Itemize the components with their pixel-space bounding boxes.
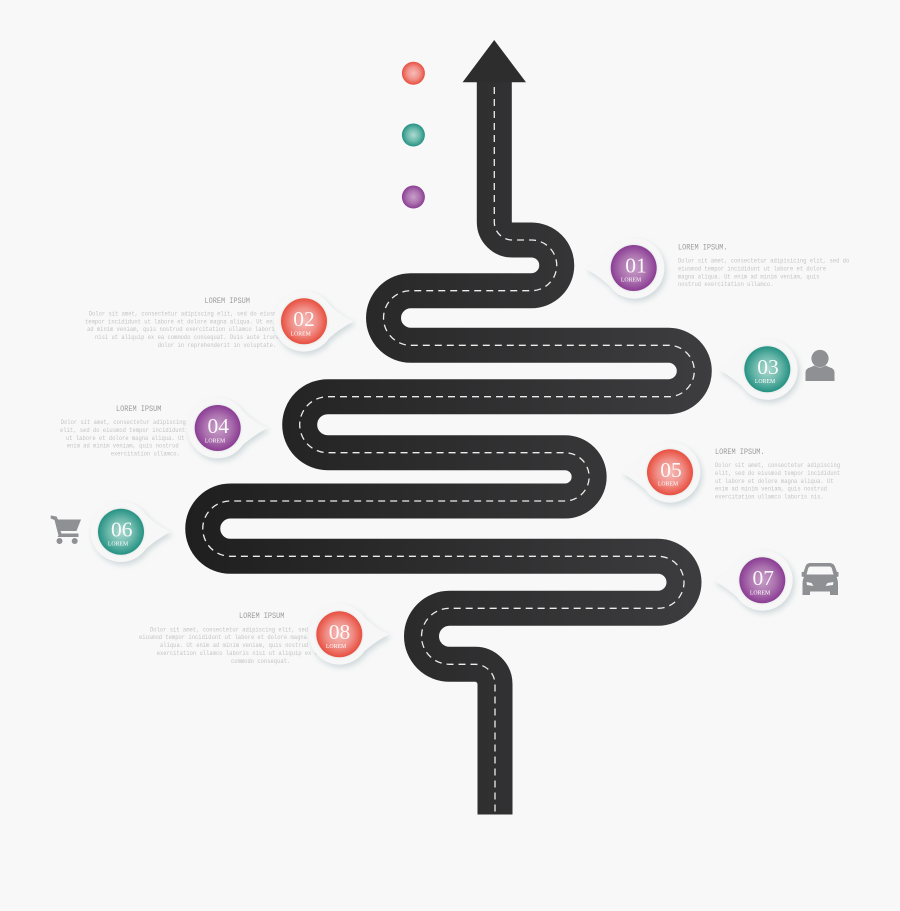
text block 05: Dolor sit amet, consectetur adipiscing <box>715 462 840 469</box>
text block 05: LOREM IPSUM. <box>715 448 764 457</box>
marker 04 <box>187 398 268 458</box>
marker 03: 03 <box>757 355 779 379</box>
winding road with arrowhead <box>203 40 694 814</box>
text block 02 <box>85 297 283 349</box>
text block 04: exercitation ullamco. <box>111 450 180 458</box>
marker 01 <box>585 238 664 299</box>
decorative dot: purple <box>402 186 425 208</box>
text block 04 <box>60 405 186 458</box>
marker 03 <box>718 339 798 400</box>
text block 04: LOREM IPSUM <box>116 405 162 414</box>
icon: shopping cart <box>51 516 81 544</box>
marker 08: LOREM <box>326 644 346 650</box>
marker 05: 05 <box>660 458 682 482</box>
marker 01: LOREM <box>621 278 641 284</box>
road surface <box>203 80 694 814</box>
text block 02: Dolor sit amet, consectetur adipiscing elit, sed do eiusmod <box>89 310 283 318</box>
text block 05 <box>715 448 840 501</box>
text block 04: elit, sed do eiusmod tempor incididunt <box>60 426 185 434</box>
decorative dot: red <box>402 62 425 85</box>
text block 05: exercitation ullamco laboris nis. <box>715 493 824 501</box>
text block 02: LOREM IPSUM <box>204 297 250 306</box>
arrowhead <box>463 40 526 82</box>
marker 01: 01 <box>625 254 647 278</box>
marker 07: LOREM <box>750 590 770 596</box>
road centre dashes <box>203 87 694 814</box>
marker 06: LOREM <box>108 542 128 548</box>
text block 02: nisi ut aliquip ex ea commodo consequat. Duis aute irure <box>95 334 280 341</box>
marker 08: 08 <box>329 620 350 644</box>
marker 04: 04 <box>208 414 229 438</box>
icon: person <box>806 350 834 381</box>
text block 01: eiusmod tempor incididunt ut labore et dolore <box>678 265 827 273</box>
marker 06: 06 <box>111 518 133 542</box>
text block 04: Dolor sit amet, consectetur adipiscing <box>61 419 186 426</box>
text block 02: ad minim veniam, quis nostrud exercitation ullamco laboris <box>87 326 278 333</box>
text block 01: LOREM IPSUM. <box>678 244 727 253</box>
text block 05: enim ad minim veniam, quis nostrud <box>715 485 827 493</box>
marker 05 <box>621 442 700 503</box>
marker 06 <box>91 501 171 562</box>
text block 08: commodo consequat. <box>231 657 290 665</box>
text block 08: aliqua. Ut enim ad minim veniam, quis nostrud <box>160 641 309 649</box>
marker 07: 07 <box>753 566 774 590</box>
icon: car <box>802 563 838 595</box>
text block 08: Dolor sit amet, consectetur adipiscing elit, sed do <box>150 626 318 633</box>
text block 08: LOREM IPSUM <box>239 613 285 621</box>
text block 01: magna aliqua. Ut enim ad minim veniam, quis <box>678 273 820 280</box>
marker 07 <box>713 550 793 611</box>
text block 01: Dolor sit amet, consectetur adipisicing elit, sed do <box>678 257 850 265</box>
marker 08 <box>309 604 389 665</box>
text block 05: elit, sed do eiusmod tempor incididunt <box>715 469 840 477</box>
text block 08: eiusmod tempor incididunt ut labore et dolore magna <box>139 634 307 641</box>
marker 04: LOREM <box>205 439 225 445</box>
marker 05: LOREM <box>658 482 678 488</box>
marker 02: LOREM <box>291 331 311 337</box>
text block 02: dolor in reprehenderit in voluptate. <box>158 342 276 349</box>
marker 02 <box>274 291 354 352</box>
marker 02: 02 <box>293 307 315 331</box>
text block 04: ut labore et dolore magna aliqua. Ut <box>66 434 185 442</box>
decorative dot: green <box>402 124 425 146</box>
text block 05: ut labore et dolore magna aliqua. Ut <box>715 477 834 485</box>
text block 02: tempor incididunt ut labore et dolore magna aliqua. Ut enim <box>85 318 280 326</box>
text block 08 <box>139 613 322 665</box>
text block 04: enim ad minim veniam, quis nostrud <box>67 442 179 450</box>
text block 01: nostrud exercitation ullamco. <box>678 281 774 288</box>
text block 01 <box>678 244 850 288</box>
text block 08: exercitation ullamco laboris nisi ut aliquip ex ea <box>157 649 322 657</box>
marker 03: LOREM <box>755 379 775 385</box>
